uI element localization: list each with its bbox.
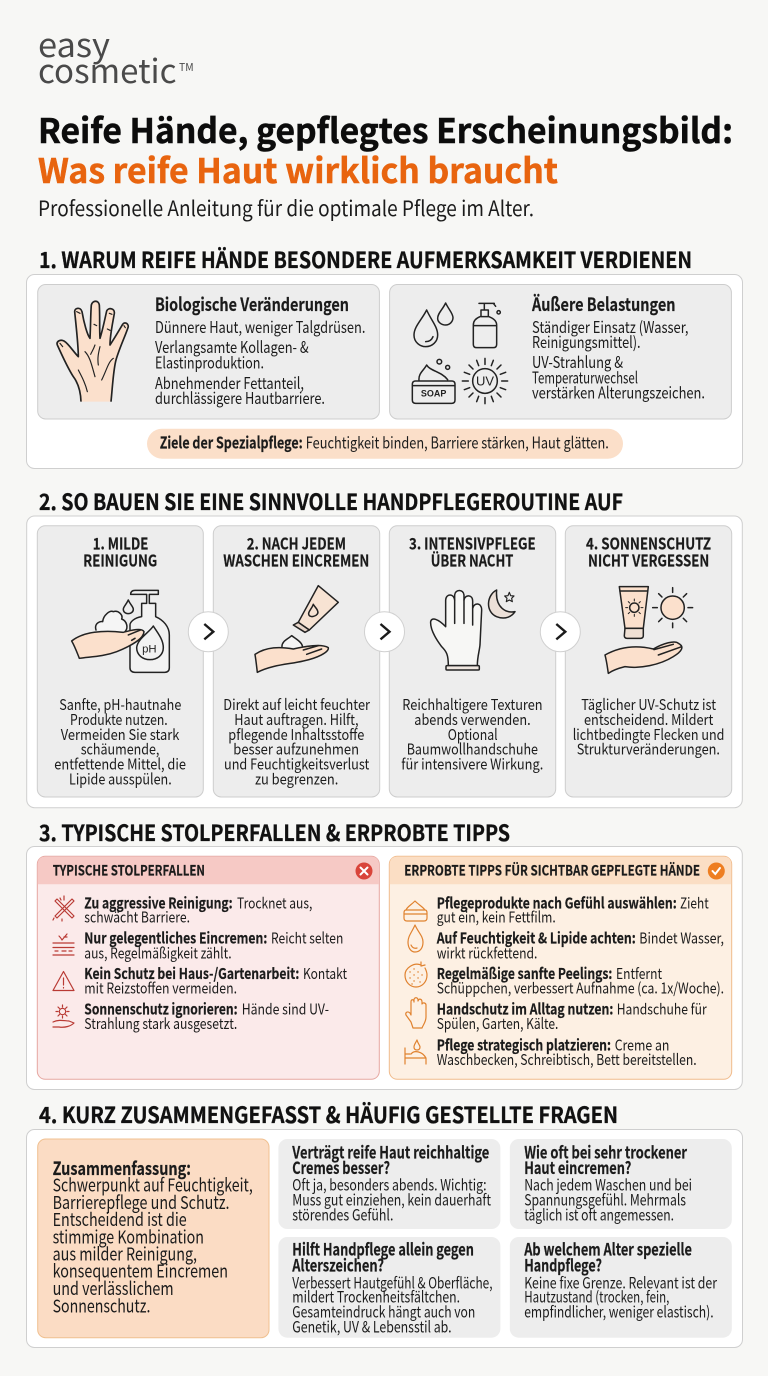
list: tips: Spülen, Garten, Kälte. (437, 1013, 558, 1034)
arrow 1 (188, 612, 228, 652)
body text: zu begrenzen. (255, 768, 338, 789)
heading (409, 530, 536, 572)
list: tips: Bindet Wasser, (639, 928, 724, 949)
FAQ card 1 (278, 1139, 500, 1229)
text block: Verlangsamte Kollagen- & (155, 334, 309, 358)
FAQ card 3: Gesamteindruck hängt auch von (292, 1301, 475, 1323)
heading: Äußere Belastungen (531, 291, 676, 317)
body text: Haut auftragen. Hilft, (234, 709, 359, 730)
card: summary: Schwerpunkt auf Feuchtigkeit, (53, 1172, 253, 1198)
list: pitfalls (84, 892, 347, 1034)
body text: abends verwenden. (414, 709, 531, 730)
title (38, 104, 733, 193)
text block: Abnehmender Fettanteil, (155, 370, 304, 394)
card: tips (389, 856, 732, 1079)
body text: Optional (448, 724, 498, 745)
list: pitfalls: Strahlung stark ausgesetzt. (84, 1013, 237, 1034)
icon: red cross (356, 862, 372, 880)
FAQ card 4: Keine fixe Grenze. Relevant ist der (524, 1271, 718, 1293)
icon: glove (406, 998, 426, 1028)
icon: cream jar (404, 901, 427, 921)
FAQ card 1: Oft ja, besonders abends. Wichtig: (292, 1174, 486, 1196)
FAQ card 3: Genetik, UV & Lebensstil ab. (292, 1315, 452, 1337)
heading: 4. SONNENSCHUTZ (586, 530, 711, 554)
text block: Ständiger Einsatz (Wasser, (532, 314, 688, 338)
FAQ card 2: Nach jedem Waschen und bei (524, 1174, 692, 1196)
icons: drops, bottle, soap, UV (412, 303, 508, 404)
text block: Elastinproduktion. (155, 350, 264, 374)
body text: Produkte nutzen. (70, 709, 168, 730)
list: pitfalls: aus, Regelmäßigkeit zählt. (84, 942, 232, 963)
section heading 2: 2. SO BAUEN SIE EINE SINNVOLLE HANDPFLEGEROUTINE AUF (39, 485, 623, 517)
heading: 1. MILDE (93, 530, 148, 554)
FAQ card 4: empfindlicher, weniger elastisch). (524, 1301, 714, 1323)
body text: Sanfte, pH-hautnahe (59, 694, 181, 715)
FAQ card 4 (510, 1237, 732, 1338)
text block: verstärken Alterungszeichen. (532, 380, 705, 404)
icon: aged hand (57, 301, 128, 402)
text block: durchlässigere Hautbarriere. (155, 385, 325, 409)
icon: orange check (708, 862, 725, 880)
step 1: mild cleansing (37, 526, 203, 797)
list: pitfalls: Nur gelegentliches Eincremen: (84, 928, 267, 949)
list: tips: Regelmäßige sanfte Peelings: (437, 963, 612, 984)
logo: easy cosmetic: TM (179, 59, 194, 75)
list: pitfalls: Sonnenschutz ignorieren: (84, 998, 238, 1019)
icon: hand with foam and pH bottle: pH (142, 643, 157, 655)
heading (586, 530, 711, 572)
logo: easy cosmetic (38, 19, 194, 93)
FAQ card 3: Hilft Handpflege allein gegen (292, 1237, 474, 1261)
icons: drops, bottle, soap, UV: SOAP (421, 389, 446, 399)
section heading 1: 1. WARUM REIFE HÄNDE BESONDERE AUFMERKSAMKEIT VERDIENEN (39, 243, 692, 275)
text block: Dünnere Haut, weniger Talgdrüsen. (155, 314, 365, 338)
icon: drop (408, 925, 423, 952)
icon: glove, moon and star (431, 590, 515, 670)
card: summary: konsequentem Eincremen (53, 1258, 228, 1284)
list: tips: Waschbecken, Schreibtisch, Bett bereitstellen. (437, 1049, 697, 1070)
heading: WASCHEN EINCREMEN (223, 548, 369, 572)
card: external stress (390, 284, 731, 419)
list: tips: Handschuhe für (617, 998, 707, 1019)
heading: Biologische Veränderungen (155, 291, 349, 317)
panel: routine (27, 516, 742, 808)
list: tips: Zieht (680, 892, 709, 913)
icon: dry skin layers (53, 934, 74, 955)
body text: Vermeiden Sie stark (61, 724, 180, 745)
FAQ card 4: Hautzustand (trocken, fein, (524, 1285, 669, 1307)
list: pitfalls: Hände sind UV- (242, 998, 329, 1019)
text block: UV-Strahlung & (532, 349, 623, 373)
text block (155, 314, 365, 409)
card: pitfalls (37, 856, 379, 1079)
panel: summary and FAQ (26, 1130, 742, 1348)
text block: Reinigungsmittel). (532, 329, 641, 353)
text block: Temperaturwechsel (532, 365, 638, 389)
heading: ERPROBTE TIPPS FÜR SICHTBAR GEPFLEGTE HÄNDE (404, 861, 700, 881)
FAQ card 1: störendes Gefühl. (292, 1204, 393, 1226)
list: tips: Creme an (615, 1035, 669, 1056)
list: pitfalls: schwächt Barriere. (84, 907, 190, 928)
list: pitfalls: Reicht selten (271, 928, 343, 949)
icon: peeling (405, 962, 427, 987)
icon: tube over hand (255, 586, 338, 672)
FAQ card 4: Ab welchem Alter spezielle (523, 1237, 692, 1261)
list: tips: Pflege strategisch platzieren: (437, 1035, 611, 1056)
callout: goals of special care (147, 429, 623, 459)
FAQ card 1: Verträgt reife Haut reichhaltige (292, 1139, 489, 1163)
card: summary: stimmige Kombination (53, 1223, 204, 1249)
body text: pflegende Inhaltsstoffe (228, 724, 364, 745)
body text: Direkt auf leicht feuchter (223, 694, 370, 715)
card: summary (38, 1139, 269, 1338)
list: pitfalls: Kontakt (303, 963, 347, 984)
body text: Strukturveränderungen. (577, 738, 720, 759)
icons: drops, bottle, soap, UV: UV (476, 374, 494, 389)
body text (54, 694, 186, 789)
heading: 2. NACH JEDEM (247, 530, 346, 554)
list: tips (436, 892, 724, 1070)
FAQ card 1: Muss gut einziehen, kein dauerhaft (292, 1189, 491, 1211)
card: summary: Zusammenfassung: (53, 1155, 191, 1181)
card: biological changes (38, 284, 379, 419)
body text: entscheidend. Mildert (584, 709, 714, 730)
card: summary: aus milder Reinigung, (53, 1241, 197, 1267)
heading: 3. INTENSIVPFLEGE (409, 530, 536, 554)
body text: Lipide ausspülen. (69, 768, 172, 789)
subtitle: Professionelle Anleitung für die optimale Pflege im Alter. (38, 193, 534, 223)
body text: Reichhaltigere Texturen (402, 694, 543, 715)
step 4: sun protection (565, 526, 732, 797)
FAQ card 2: Spannungsgefühl. Mehrmals (524, 1189, 686, 1211)
section heading 4: 4. KURZ ZUSAMMENGEFASST & HÄUFIG GESTELLTE FRAGEN (39, 1098, 618, 1130)
body text: für intensivere Wirkung. (401, 753, 543, 774)
list: pitfalls: Kein Schutz bei Haus-/Gartenarbeit: (84, 963, 299, 984)
list: tips: Handschutz im Alltag nutzen: (437, 998, 613, 1019)
list: tips: Auf Feuchtigkeit & Lipide achten: (436, 928, 636, 949)
FAQ card 2: Wie oft bei sehr trockener (524, 1139, 688, 1163)
heading: TYPISCHE STOLPERFALLEN (53, 861, 205, 881)
panel: why mature hands (26, 274, 742, 468)
logo: easy cosmetic: cosmetic (38, 45, 176, 93)
arrow 2 (364, 612, 404, 652)
icon: hand with foam and pH bottle (72, 590, 169, 672)
icon: bed with drop (405, 1040, 426, 1064)
heading (83, 530, 157, 572)
icon: warning (53, 972, 74, 990)
arrow 3 (540, 612, 580, 652)
heading: NICHT VERGESSEN (588, 548, 709, 572)
body text: und Feuchtigkeitsverlust (224, 753, 370, 774)
step 2: cream after washing (213, 526, 380, 797)
FAQ card 3: mildert Trockenheitsfältchen. (292, 1285, 460, 1307)
callout: goals of special care: Ziele der Spezialpflege: (160, 430, 303, 454)
body text: besser aufzunehmen (233, 738, 359, 759)
body text: Baumwollhandschuhe (407, 738, 538, 759)
list: tips: gut ein, kein Fettfilm. (437, 907, 556, 928)
callout: goals of special care: Feuchtigkeit binden, Barriere stärken, Haut glätten. (306, 430, 609, 454)
icon: sunscreen tube, sun, hand (605, 587, 693, 673)
list: pitfalls: mit Reizstoffen vermeiden. (84, 977, 237, 998)
list: pitfalls: Zu aggressive Reinigung: (84, 892, 233, 913)
body text: entfettende Mittel, die (54, 753, 186, 774)
section heading 3: 3. TYPISCHE STOLPERFALLEN & ERPROBTE TIPPS (39, 816, 510, 848)
heading (223, 530, 369, 572)
list: tips: wirkt rückfettend. (437, 942, 537, 963)
body text (573, 694, 724, 759)
FAQ card 2 (510, 1139, 732, 1229)
body text (401, 694, 543, 774)
body text: Täglicher UV-Schutz ist (581, 694, 716, 715)
heading: ÜBER NACHT (431, 548, 513, 572)
title: Reife Hände, gepflegtes Erscheinungsbild: (38, 104, 733, 153)
body text: schäumende, (81, 738, 159, 759)
FAQ card 1: Cremes besser? (292, 1155, 390, 1179)
title: Was reife Haut wirklich braucht (38, 144, 558, 193)
list: tips: Pflegeprodukte nach Gefühl auswählen: (437, 892, 677, 913)
logo: easy cosmetic: easy (38, 19, 110, 67)
body text (223, 694, 370, 789)
FAQ card 4: Handpflege? (524, 1253, 602, 1277)
list: tips: Entfernt (616, 963, 662, 984)
step 3: overnight care (389, 526, 556, 797)
FAQ card 3: Alterszeichen? (292, 1253, 384, 1277)
list: pitfalls: Trocknet aus, (237, 892, 312, 913)
FAQ card 2: Haut eincremen? (524, 1155, 631, 1179)
icon: sun and hand (53, 1005, 74, 1027)
panel: pitfalls and tips (26, 846, 742, 1090)
card: summary: und verlässlichem (53, 1275, 174, 1301)
icon: crossed hands (53, 896, 74, 921)
card: summary: Barrierepflege und Schutz. (53, 1189, 229, 1215)
FAQ card 2: täglich ist oft angemessen. (524, 1204, 674, 1226)
card: summary: Entscheidend ist die (53, 1206, 187, 1232)
FAQ card 3: Verbessert Hautgefühl & Oberfläche, (292, 1271, 492, 1293)
body text: lichtbedingte Flecken und (573, 724, 724, 745)
heading: REINIGUNG (83, 548, 157, 572)
card: summary: Sonnenschutz. (53, 1292, 150, 1318)
FAQ card 3 (278, 1237, 500, 1338)
text block (532, 314, 705, 404)
